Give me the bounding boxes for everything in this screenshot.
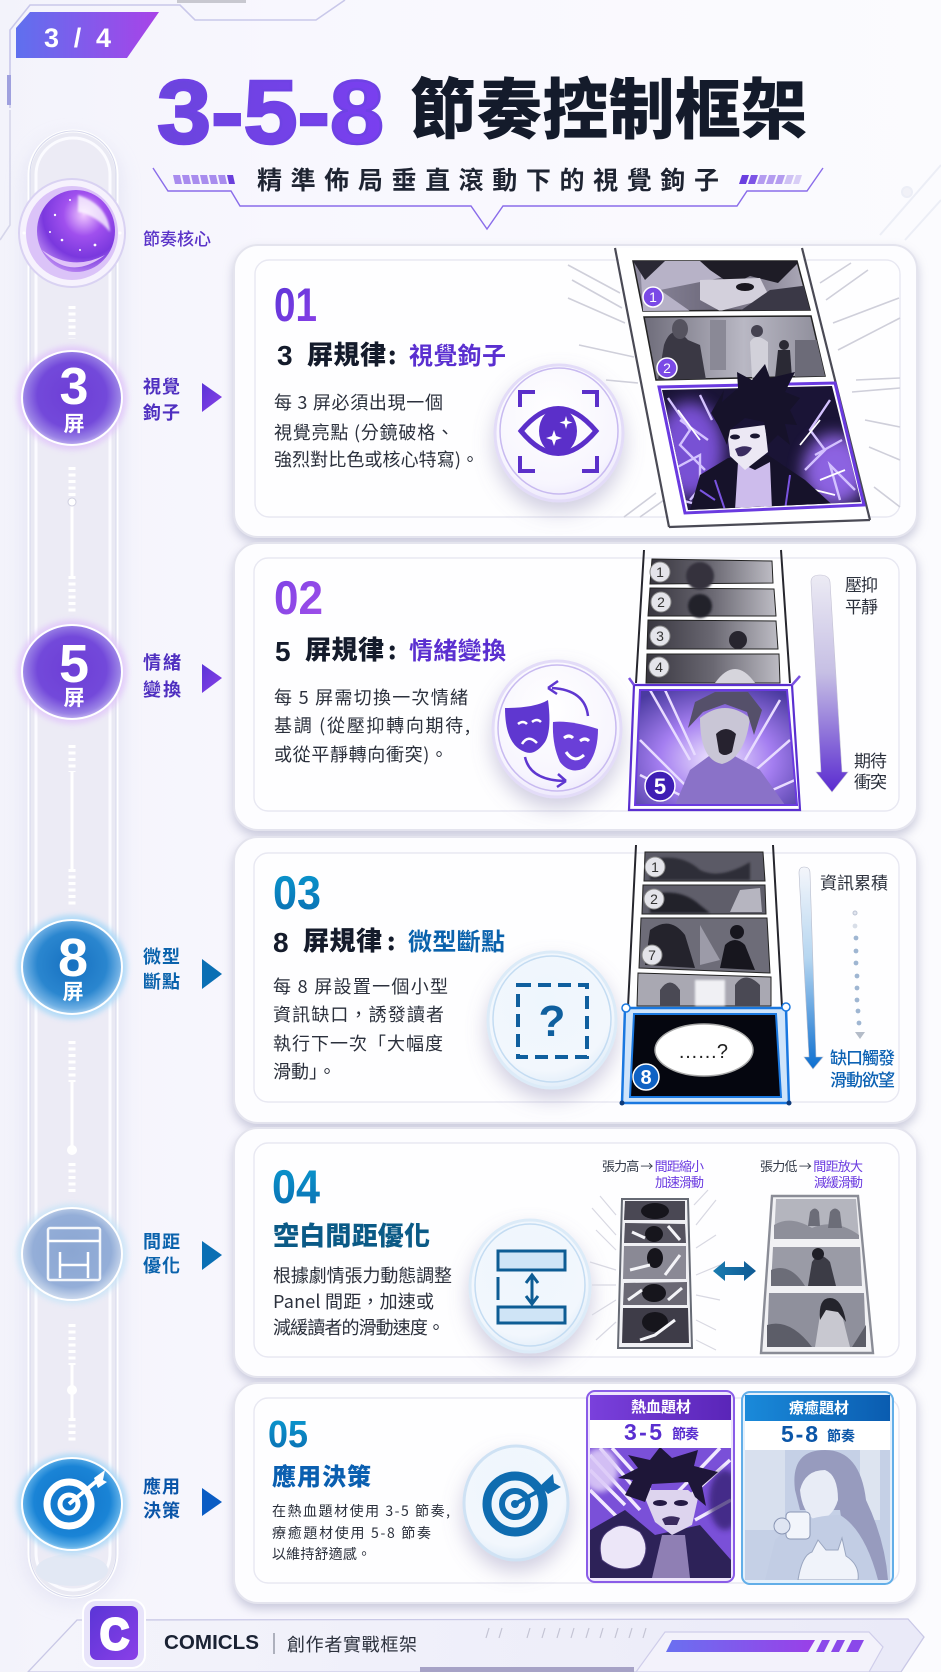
climax panel 5: 5 — [654, 774, 666, 799]
panel numbers: 2 — [650, 891, 658, 907]
card: hot-blooded genre: 3-5 — [624, 1419, 662, 1445]
logo: C — [100, 1610, 129, 1659]
number 04: 04 — [272, 1160, 320, 1213]
manga strip: wide spacing — [761, 1196, 873, 1353]
HUD frame lines top left — [0, 0, 345, 240]
subtitle banner: 精準佈局垂直滾動下的視覺鉤子 — [257, 161, 719, 197]
heading 05: 應用決策 — [272, 1457, 371, 1492]
rail label: 節奏核心: 節奏核心 — [143, 225, 211, 250]
gap panel 8: ……? — [678, 1041, 728, 1063]
heading 01: 視覺鉤子 — [409, 336, 506, 371]
heading 02: 情緒變換 — [409, 631, 506, 666]
card: healing genre — [742, 1392, 893, 1584]
label: 資訊累積: 資訊累積 — [820, 869, 888, 894]
speed lines around strip — [568, 263, 900, 517]
rail label: 視覺鉤子 — [143, 373, 180, 425]
panel numbers 1-4: 3 — [656, 628, 664, 644]
icon: theatre masks in glass disc — [493, 661, 621, 797]
body text 01: 強烈對比色或核心特寫)。 — [274, 446, 479, 472]
subtitle banner — [153, 161, 823, 229]
label: low tension: 張力低 → 間距放大 — [760, 1156, 863, 1175]
body text 01: 視覺亮點 (分鏡破格、 — [274, 419, 454, 445]
heading 02: 5 — [275, 636, 291, 667]
body text 05: 以維持舒適感。 — [272, 1544, 371, 1564]
panel: card 04 spacing optimisation — [234, 1128, 917, 1377]
panel number 1 — [643, 287, 663, 307]
heading 02 — [275, 630, 506, 667]
card: hot-blooded genre: 熱血題材 — [631, 1396, 691, 1417]
manga strip 01 — [615, 248, 870, 527]
rail label: 微型斷點: 微型 — [143, 943, 180, 969]
heading 03: : — [387, 922, 395, 957]
rail label: 情緒變換: 變換 — [143, 676, 181, 702]
panel: card 02 emotion shift — [234, 543, 917, 830]
brand name: COMICLS — [164, 1632, 259, 1654]
heading 03: 微型斷點 — [408, 922, 505, 957]
manga strip 03 — [620, 845, 792, 1106]
card: hot-blooded genre: 節奏 — [672, 1424, 699, 1444]
heading 03: 屏規律 — [303, 921, 382, 958]
icon: spacing in glass disc — [470, 1220, 590, 1352]
footer tagline: 創作者實戰框架 — [287, 1631, 417, 1657]
label: 缺口觸發滑動欲望 — [830, 1044, 895, 1091]
page badge: 3 / 4 — [44, 23, 111, 53]
icon: dashed question box in glass disc — [488, 952, 616, 1088]
manga strip: tight spacing — [618, 1199, 692, 1348]
label: 期待衝突: 期待 — [854, 747, 887, 772]
heading 01 — [277, 335, 506, 372]
arrow: to card 4 — [202, 1241, 222, 1270]
card: healing genre: 節奏 — [827, 1426, 855, 1446]
arrow: to card 2 — [202, 664, 222, 693]
body text 02: 或從平靜轉向衝突)。 — [274, 741, 448, 767]
node: 8 屏: 屏 — [62, 976, 84, 1006]
heading 02: 屏規律 — [305, 630, 384, 667]
body text 05: 療癒題材使用 5-8 節奏 — [272, 1523, 431, 1543]
body text 05: 在熱血題材使用 3-5 節奏, — [272, 1501, 450, 1521]
body text 03 — [273, 973, 448, 1084]
heading 02: : — [388, 631, 396, 666]
arrow: to card 5 — [202, 1488, 222, 1516]
panel numbers 1-4: 2 — [657, 594, 665, 610]
rail label: 應用決策: 應用 — [143, 1473, 180, 1499]
icon: eye in glass disc — [495, 365, 623, 501]
body text 02: 每 5 屏需切換一次情緒 — [274, 684, 468, 710]
panel numbers: 1 — [651, 859, 659, 875]
body text 03: 執行下一次「大幅度 — [273, 1030, 443, 1056]
climax panel 5 — [629, 676, 800, 810]
panel number 2 — [657, 358, 677, 378]
node: 8 屏: 8 — [58, 928, 88, 988]
panel number 2: 2 — [663, 360, 671, 376]
manga strip 02 — [629, 550, 800, 810]
icon: dashed question box in glass disc: ? — [539, 997, 565, 1046]
number 02: 02 — [274, 571, 323, 624]
body text 04: Panel 間距，加速或 — [273, 1288, 434, 1314]
label: high tension — [602, 1156, 704, 1191]
panel numbers 1-4 — [649, 562, 671, 677]
progress dots — [853, 911, 865, 1039]
footer bar — [28, 1600, 924, 1672]
number 05: 05 — [268, 1414, 308, 1456]
node: 5 屏: 5 — [59, 634, 89, 694]
rail label: 微型斷點 — [143, 943, 180, 994]
label: 缺口觸發滑動欲望: 滑動欲望 — [830, 1066, 895, 1091]
rail label: 間距優化: 間距 — [143, 1228, 180, 1254]
label: high tension: 加速滑動 — [655, 1172, 704, 1191]
footer progress bar — [636, 1632, 883, 1672]
body text 04: 減緩讀者的滑動速度。 — [273, 1314, 445, 1340]
label: high tension: 張力高 → 間距縮小 — [602, 1156, 704, 1175]
body text 04 — [273, 1262, 452, 1340]
panel: card 03 micro breakpoint — [234, 837, 917, 1123]
body text 03: 每 8 屏設置一個小型 — [273, 973, 448, 999]
gap panel 8: 8 — [640, 1067, 652, 1089]
label: 壓抑平靜: 壓抑 — [845, 571, 878, 596]
double arrow — [713, 1261, 756, 1281]
number 01: 01 — [274, 278, 317, 331]
gradient arrow 03 — [799, 867, 823, 1069]
node: target — [17, 1454, 127, 1554]
rail label: 應用決策 — [143, 1473, 180, 1523]
heading 01: 3 — [277, 340, 293, 371]
node: 3 屏 — [17, 346, 127, 450]
heading 03 — [273, 921, 505, 958]
decorative circuit right — [880, 165, 941, 240]
logo — [83, 1600, 145, 1668]
label: 期待衝突: 衝突 — [854, 768, 887, 793]
body text 04: 根據劇情張力動態調整 — [273, 1262, 452, 1288]
heading 03: 8 — [273, 927, 289, 958]
label: low tension — [760, 1156, 863, 1191]
label: 缺口觸發滑動欲望: 缺口觸發 — [830, 1044, 895, 1069]
label: 期待衝突 — [854, 747, 887, 793]
heading 01: 屏規律 — [307, 335, 386, 372]
footer ticks — [486, 1628, 646, 1638]
node: spacing icon — [17, 1204, 127, 1304]
body text 02: 基調 (從壓抑轉向期待, — [274, 712, 470, 738]
rail label: 情緒變換: 情緒 — [143, 649, 181, 675]
rail label: 應用決策: 決策 — [143, 1497, 180, 1523]
rail label: 視覺鉤子: 視覺 — [143, 373, 180, 399]
page badge — [16, 12, 159, 58]
card: hot-blooded genre — [582, 1391, 741, 1582]
body text 01: 每 3 屏必須出現一個 — [274, 389, 443, 415]
node: 3 屏: 3 — [60, 358, 88, 416]
node: 8 屏 — [17, 915, 127, 1019]
label: 壓抑平靜 — [845, 571, 878, 618]
number 03: 03 — [273, 866, 321, 919]
body text 03: 滑動」。 — [273, 1058, 336, 1084]
body text 02 — [274, 684, 470, 767]
icon: target in glass disc — [464, 1446, 568, 1560]
card: healing genre: 療癒題材 — [789, 1397, 849, 1418]
heading 04: 空白間距優化 — [273, 1216, 430, 1253]
hero breakout panel — [656, 364, 867, 513]
rail label: 情緒變換 — [143, 649, 181, 702]
label: low tension: 減緩滑動 — [814, 1172, 863, 1191]
body text 01 — [274, 389, 479, 472]
rail label: 微型斷點: 斷點 — [143, 968, 180, 994]
body text 05 — [272, 1501, 450, 1564]
gap panel 8 — [620, 1003, 792, 1106]
gradient arrow 02 — [811, 575, 848, 792]
body text 03: 資訊缺口，誘發讀者 — [273, 1001, 444, 1027]
arrow: to card 3 — [202, 959, 222, 989]
rail label: 間距優化 — [143, 1228, 180, 1278]
title: 3-5-8 — [157, 63, 384, 163]
title — [157, 57, 807, 163]
rail label: 間距優化: 優化 — [143, 1252, 180, 1278]
panel: card 01 visual hook — [234, 245, 917, 537]
title: 節奏控制框架 — [410, 57, 807, 153]
node: 5 屏: 屏 — [64, 682, 84, 712]
node: rhythm core orb — [19, 179, 125, 287]
card: healing genre: 5-8 — [781, 1421, 818, 1447]
panel numbers — [642, 857, 665, 965]
speed lines around tight strip — [590, 1190, 720, 1350]
heading 01: : — [388, 336, 396, 371]
node: 5 屏 — [17, 620, 127, 724]
panel numbers: 7 — [648, 947, 656, 963]
left rail capsule — [22, 131, 124, 1605]
rail label: 視覺鉤子: 鉤子 — [143, 399, 180, 425]
panel: card 05 application decision — [234, 1383, 917, 1603]
label: 壓抑平靜: 平靜 — [845, 593, 878, 618]
panel number 1: 1 — [649, 289, 657, 305]
arrow: to card 1 — [202, 383, 222, 412]
panel numbers 1-4: 4 — [655, 659, 663, 675]
panel numbers 1-4: 1 — [656, 564, 664, 580]
node: 3 屏: 屏 — [64, 408, 84, 438]
